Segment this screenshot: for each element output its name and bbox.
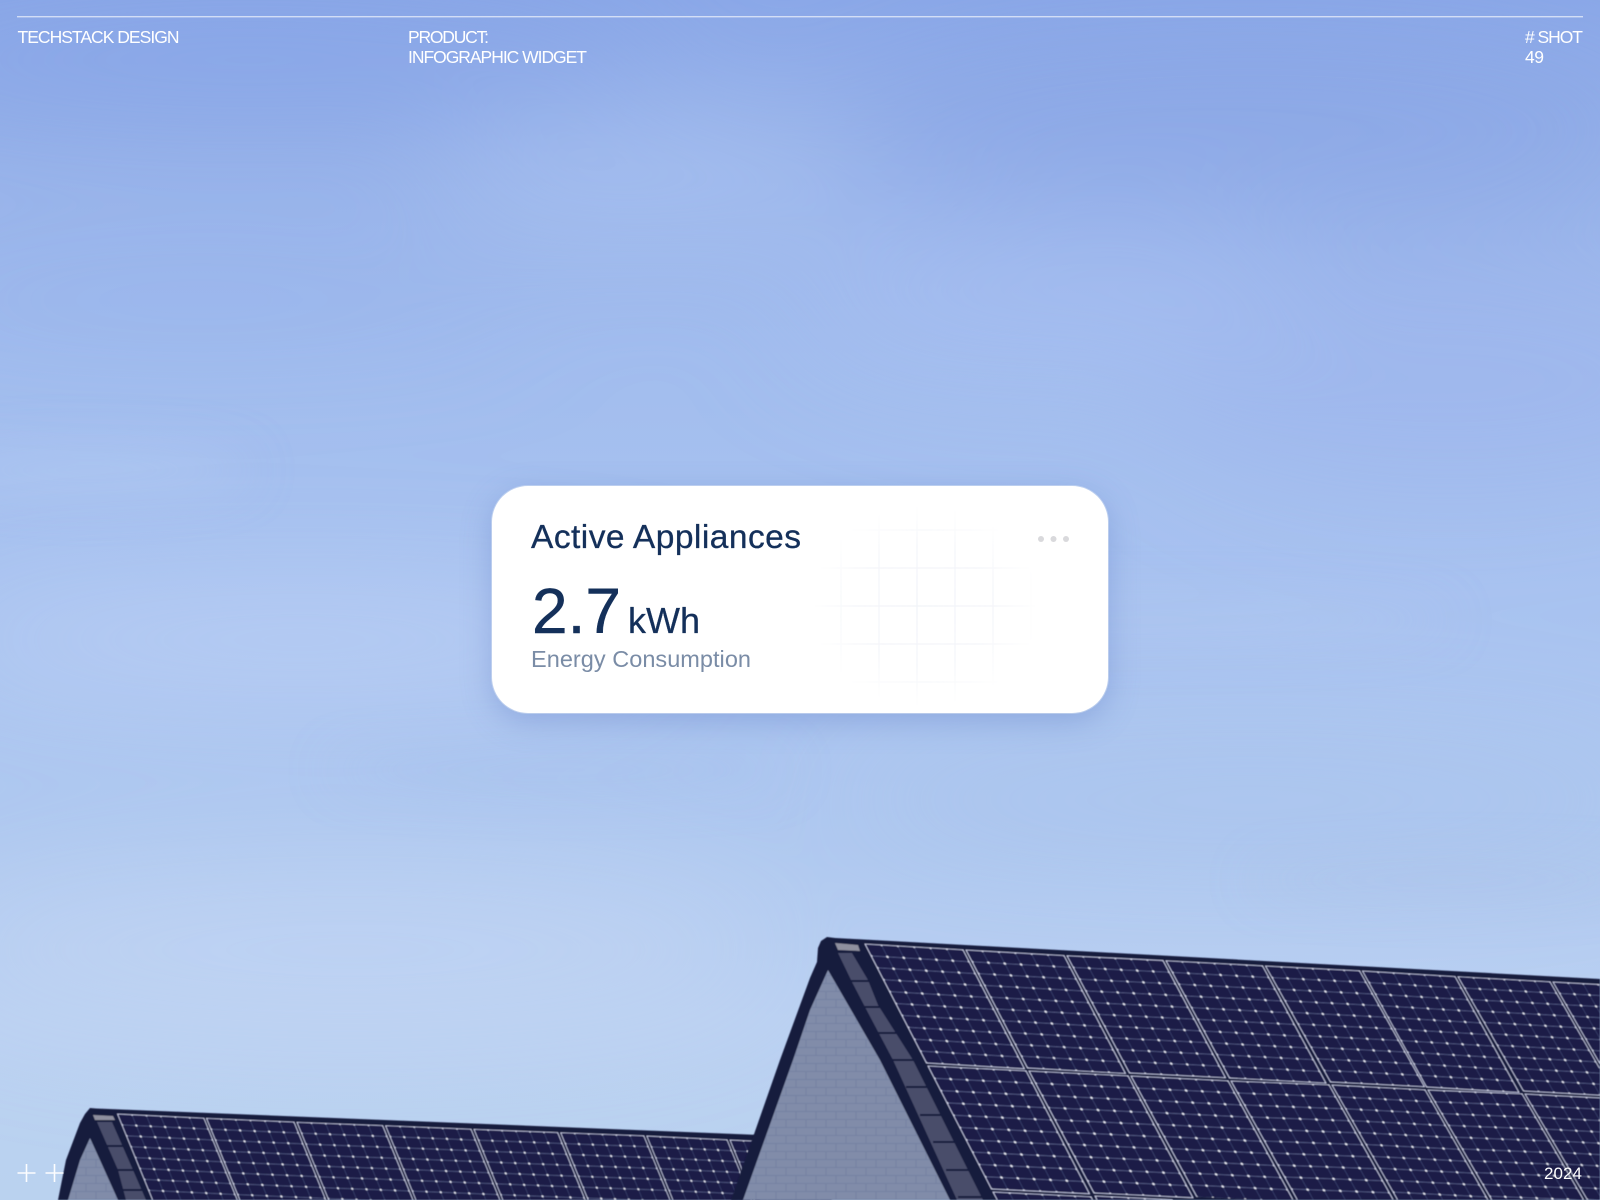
large roof solar array [865,944,1600,1200]
header: product label [408,27,587,67]
small roof solar array [118,1114,834,1200]
header: studio name: TECHSTACK DESIGN [18,27,180,47]
small gable wall [68,1138,118,1200]
large gable wall [743,970,950,1200]
small roof dark body [58,1108,760,1200]
large house roof with solar panels [731,937,1600,1200]
large fascia tiles [835,943,984,1200]
header: product label: PRODUCT: [408,27,489,47]
icon: two plus marks [18,1164,64,1182]
large roof dark body [731,937,1600,1200]
header: shot number: 49 [1525,47,1544,67]
heading: Active Appliances: Active Appliances [531,519,801,556]
header: shot number [1525,27,1583,67]
value: 2.7: 2.7 [532,575,621,647]
label: Energy Consumption: Energy Consumption [531,646,751,672]
panel: energy consumption widget [492,486,1108,713]
small fascia tiles [93,1115,146,1200]
icon: more menu dots [1038,536,1069,542]
small house roof with solar panels [58,1108,834,1200]
header: shot number: # SHOT [1525,27,1583,47]
footer: year: 2024 [1544,1164,1582,1183]
grid watermark [845,536,1005,676]
unit: kWh: kWh [628,600,700,641]
header rule [17,16,1583,17]
header: product label: INFOGRAPHIC WIDGET [408,47,587,67]
